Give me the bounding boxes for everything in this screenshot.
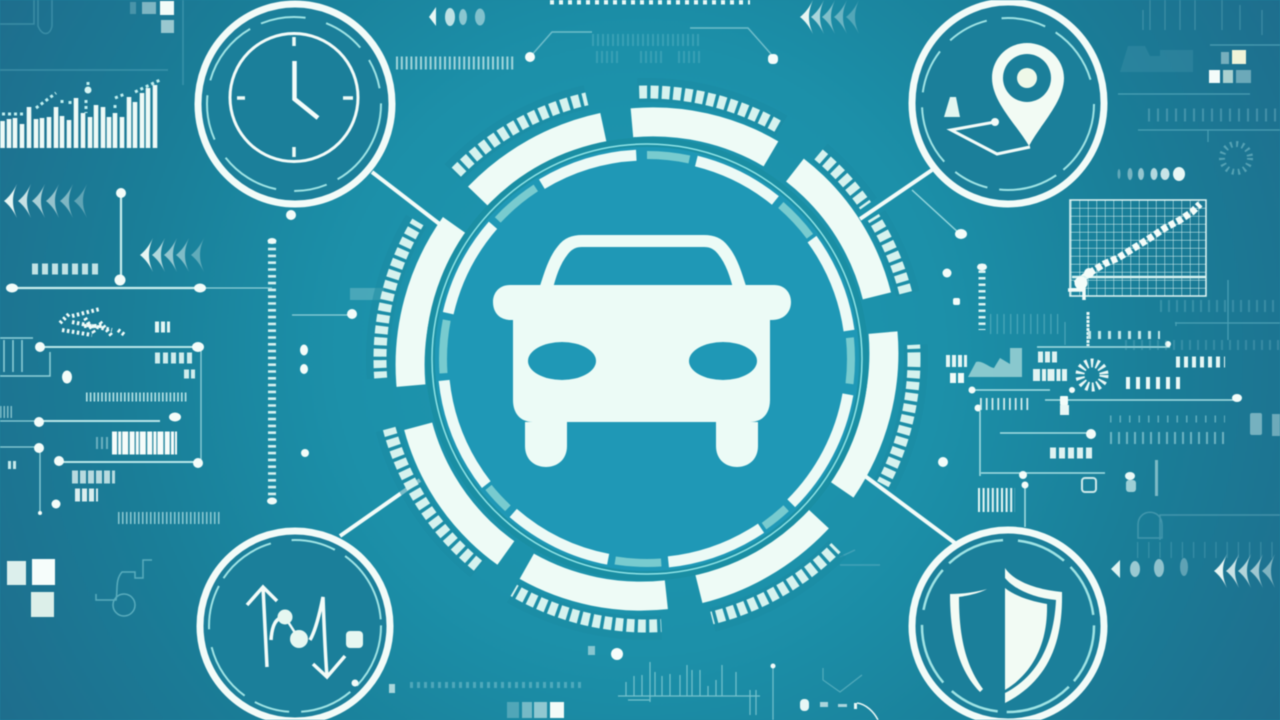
area chart: [968, 348, 1022, 377]
barcode strip: [396, 56, 516, 70]
spike chart: [618, 662, 773, 720]
hub inner white segments: [367, 79, 927, 639]
small markers: [32, 264, 98, 274]
shield right outline: [1005, 568, 1062, 703]
chevrons top right: [800, 0, 859, 34]
circuit traces with nodes: [525, 28, 778, 64]
pin centre: [1017, 68, 1037, 88]
fading dots: [429, 7, 485, 26]
connector lines with nodes: [0, 188, 357, 515]
dot cluster right: [1080, 363, 1104, 387]
panel: top strip decorations: [396, 0, 859, 64]
panel: bottom strip decorations: [389, 646, 878, 720]
arrows dashed ring: [209, 540, 381, 712]
hub outer tick ring: [380, 92, 914, 626]
top dotted line: [550, 0, 750, 4]
chevrons row two: [140, 238, 204, 272]
fading dots right: [1118, 167, 1185, 181]
line chart on grid: [1068, 200, 1206, 346]
car roof: [538, 235, 748, 292]
connector: pin to hub: [860, 170, 932, 219]
connector: arrows to hub: [340, 480, 420, 536]
panel: left data decorations: [0, 0, 384, 617]
faint spike chart: [990, 314, 1060, 334]
chevrons row one: [4, 184, 87, 218]
connector: clock to hub: [372, 172, 446, 229]
hub inner faint segments: [443, 155, 851, 563]
central hub: [372, 84, 922, 634]
barcode items: [0, 327, 220, 518]
panel: right data decorations: [840, 0, 1280, 588]
pin marker: [992, 43, 1064, 146]
faint cluster right: [1222, 144, 1250, 172]
square node: [346, 631, 363, 648]
icon: car: [493, 235, 791, 467]
car body: [493, 285, 791, 467]
squares top left: [130, 1, 174, 33]
route: [951, 122, 1030, 154]
squares bottom left: [7, 559, 55, 617]
connector: shield to hub: [865, 476, 955, 543]
clock dashed ring: [207, 17, 381, 191]
car headlight left: [528, 342, 596, 380]
down arrow: [310, 597, 345, 677]
clock ticks and hands: [237, 37, 353, 157]
right nodes and traces: [912, 45, 1280, 527]
bar chart: [2, 80, 160, 148]
shield left outline: [950, 589, 987, 692]
icon panel: location pin: [912, 2, 1104, 204]
cone: [944, 97, 960, 117]
hub cyan ring: [432, 144, 862, 574]
car headlight right: [689, 342, 757, 380]
faint mid markers: [350, 288, 384, 300]
small node: [352, 680, 358, 686]
faint circuit glyph: [96, 560, 152, 616]
bottom right fading dots: [1111, 558, 1188, 578]
top right faint area and squares: [1120, 0, 1280, 115]
pin hole: [1003, 54, 1051, 102]
icon panel: arrows: [200, 531, 390, 720]
pin dashed ring: [922, 18, 1094, 190]
connector nodes: [285, 617, 299, 639]
dot cluster: [60, 309, 126, 336]
shield dashed ring: [922, 540, 1094, 712]
blocks far right: [1082, 413, 1280, 496]
faint trace: [823, 668, 862, 692]
hub inner disc: [435, 147, 859, 571]
pin ring: [912, 2, 1104, 204]
shield right fill: [1005, 588, 1047, 690]
faint bottom right traces: [840, 512, 1280, 565]
clock ring: [198, 4, 392, 204]
tick column: [267, 238, 277, 504]
top left faint lines: [0, 0, 183, 85]
tick column right: [977, 264, 987, 330]
right barcodes: [946, 306, 1280, 550]
hub outer white band: [312, 24, 982, 694]
icon panel: shield: [912, 530, 1104, 720]
nodes: [389, 646, 623, 693]
arrows ring: [200, 531, 390, 720]
bottom right chevrons: [1214, 554, 1275, 588]
hub tick backing: [267, 0, 1027, 720]
icon panel: clock: [198, 4, 392, 204]
hub teal ring: [430, 142, 864, 576]
up arrow: [247, 587, 285, 667]
shield ring: [912, 530, 1104, 720]
small marks: [800, 699, 878, 720]
clock face: [230, 34, 358, 162]
gradient squares: [507, 702, 564, 718]
faint label dashes: [410, 682, 585, 688]
